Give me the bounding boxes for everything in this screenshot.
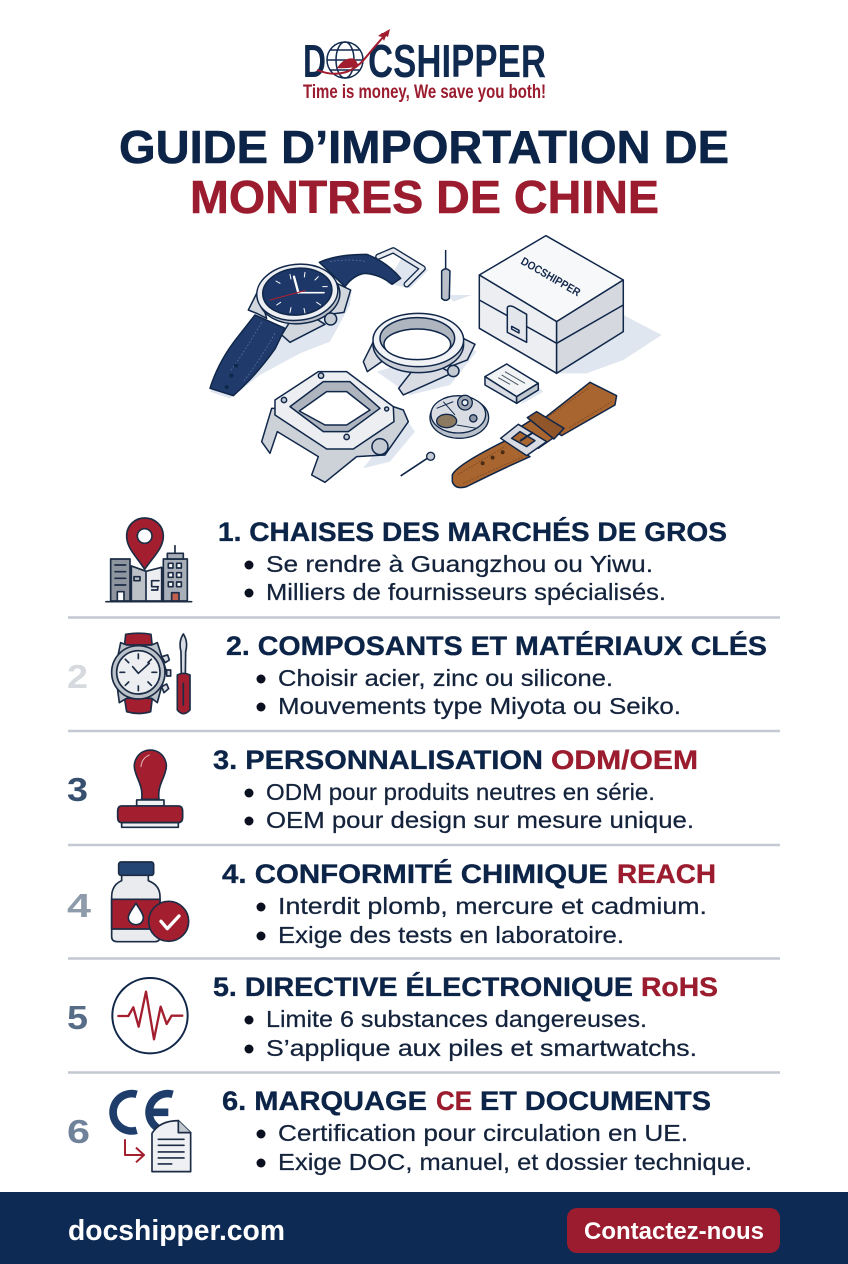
row 2: components [67, 630, 767, 719]
row 6: CE marking [67, 1086, 752, 1175]
bullets 3 [244, 779, 694, 833]
heading 6 [222, 1086, 711, 1116]
icon: city location pin [106, 518, 192, 602]
illustration: watch parts and box [210, 236, 662, 488]
logo: DocShipper: Time is money, We save you both! [303, 82, 546, 103]
title [119, 121, 729, 223]
bullets 1 [244, 551, 666, 605]
screwdriver [442, 250, 450, 300]
row 5: RoHS [67, 971, 718, 1061]
row 3: customisation [67, 745, 698, 833]
square watch case [262, 372, 408, 482]
bullets 6: Certification pour circulation en UE. [278, 1120, 688, 1146]
bullets 2: Choisir acier, zinc ou silicone. [278, 665, 613, 691]
bullets 4: Interdit plomb, mercure et cadmium. [278, 893, 707, 919]
bullets 5: Limite 6 substances dangereuses. [266, 1006, 647, 1032]
number 5: 5 [67, 999, 88, 1036]
contact button: Contactez-nous [584, 1218, 764, 1245]
brown strap [452, 382, 617, 488]
bullets 3: ODM pour produits neutres en série. [266, 779, 655, 805]
icon: CE and document [113, 1094, 191, 1172]
footer website: docshipper.com [68, 1215, 285, 1247]
heading 3: ODM/OEM [551, 745, 698, 775]
battery [485, 364, 538, 403]
heading 1: 1. CHAISES DES MARCHÉS DE GROS [218, 516, 727, 547]
bullets 1: Milliers de fournisseurs spécialisés. [266, 579, 666, 605]
heading 4: 4. CONFORMITÉ CHIMIQUE [222, 858, 608, 889]
movement [430, 395, 489, 438]
number 6: 6 [67, 1113, 90, 1150]
icon: waveform circle [112, 978, 188, 1053]
bullets 2 [256, 665, 681, 719]
logo: DocShipper: D [303, 35, 326, 87]
icon: watch and screwdriver [112, 633, 190, 714]
bullets 5: S’applique aux piles et smartwatchs. [266, 1035, 697, 1061]
heading 2: 2. COMPOSANTS ET MATÉRIAUX CLÉS [226, 630, 767, 661]
dark strap watch [210, 250, 423, 396]
bullets 4: Exige des tests en laboratoire. [278, 922, 624, 948]
watch box [479, 236, 623, 373]
heading 6: 6. MARQUAGE [222, 1086, 427, 1116]
heading 3 [213, 745, 698, 775]
logo: DocShipper: CSHIPPER [368, 35, 546, 87]
heading 4 [222, 858, 716, 889]
heading 5: RoHS [641, 972, 718, 1002]
heading 4: REACH [617, 859, 716, 889]
number 2: 2 [67, 658, 88, 695]
bullets 6 [256, 1120, 752, 1175]
bullets 6: Exige DOC, manuel, et dossier technique. [278, 1149, 752, 1175]
row 4: REACH [67, 858, 716, 948]
row 1: wholesale markets [106, 516, 727, 605]
bullets 1: Se rendre à Guangzhou ou Yiwu. [266, 551, 653, 577]
round watch case [363, 313, 475, 395]
footer bar [0, 1192, 848, 1264]
bullets 3: OEM pour design sur mesure unique. [266, 807, 694, 833]
pin [401, 458, 427, 476]
contact button [567, 1208, 780, 1253]
icon: bottle with check [112, 862, 189, 942]
bullets 2: Mouvements type Miyota ou Seiko. [278, 693, 681, 719]
illustration: watch parts and box: DOCSHIPPER [518, 256, 582, 299]
bullets 4 [256, 893, 707, 948]
heading 3: 3. PERSONNALISATION [213, 745, 543, 775]
icon: stamp [118, 750, 183, 827]
heading 6: CE [436, 1086, 472, 1116]
bullets 5 [244, 1006, 697, 1061]
shadows [210, 255, 662, 468]
heading 6: ET DOCUMENTS [480, 1086, 711, 1116]
dividers [68, 618, 780, 1072]
number 3: 3 [67, 771, 88, 808]
title: GUIDE D’IMPORTATION DE [119, 121, 729, 173]
logo: DocShipper [303, 29, 546, 103]
number 4: 4 [67, 887, 92, 924]
title: MONTRES DE CHINE [190, 171, 659, 223]
heading 5: 5. DIRECTIVE ÉLECTRONIQUE [213, 971, 633, 1002]
